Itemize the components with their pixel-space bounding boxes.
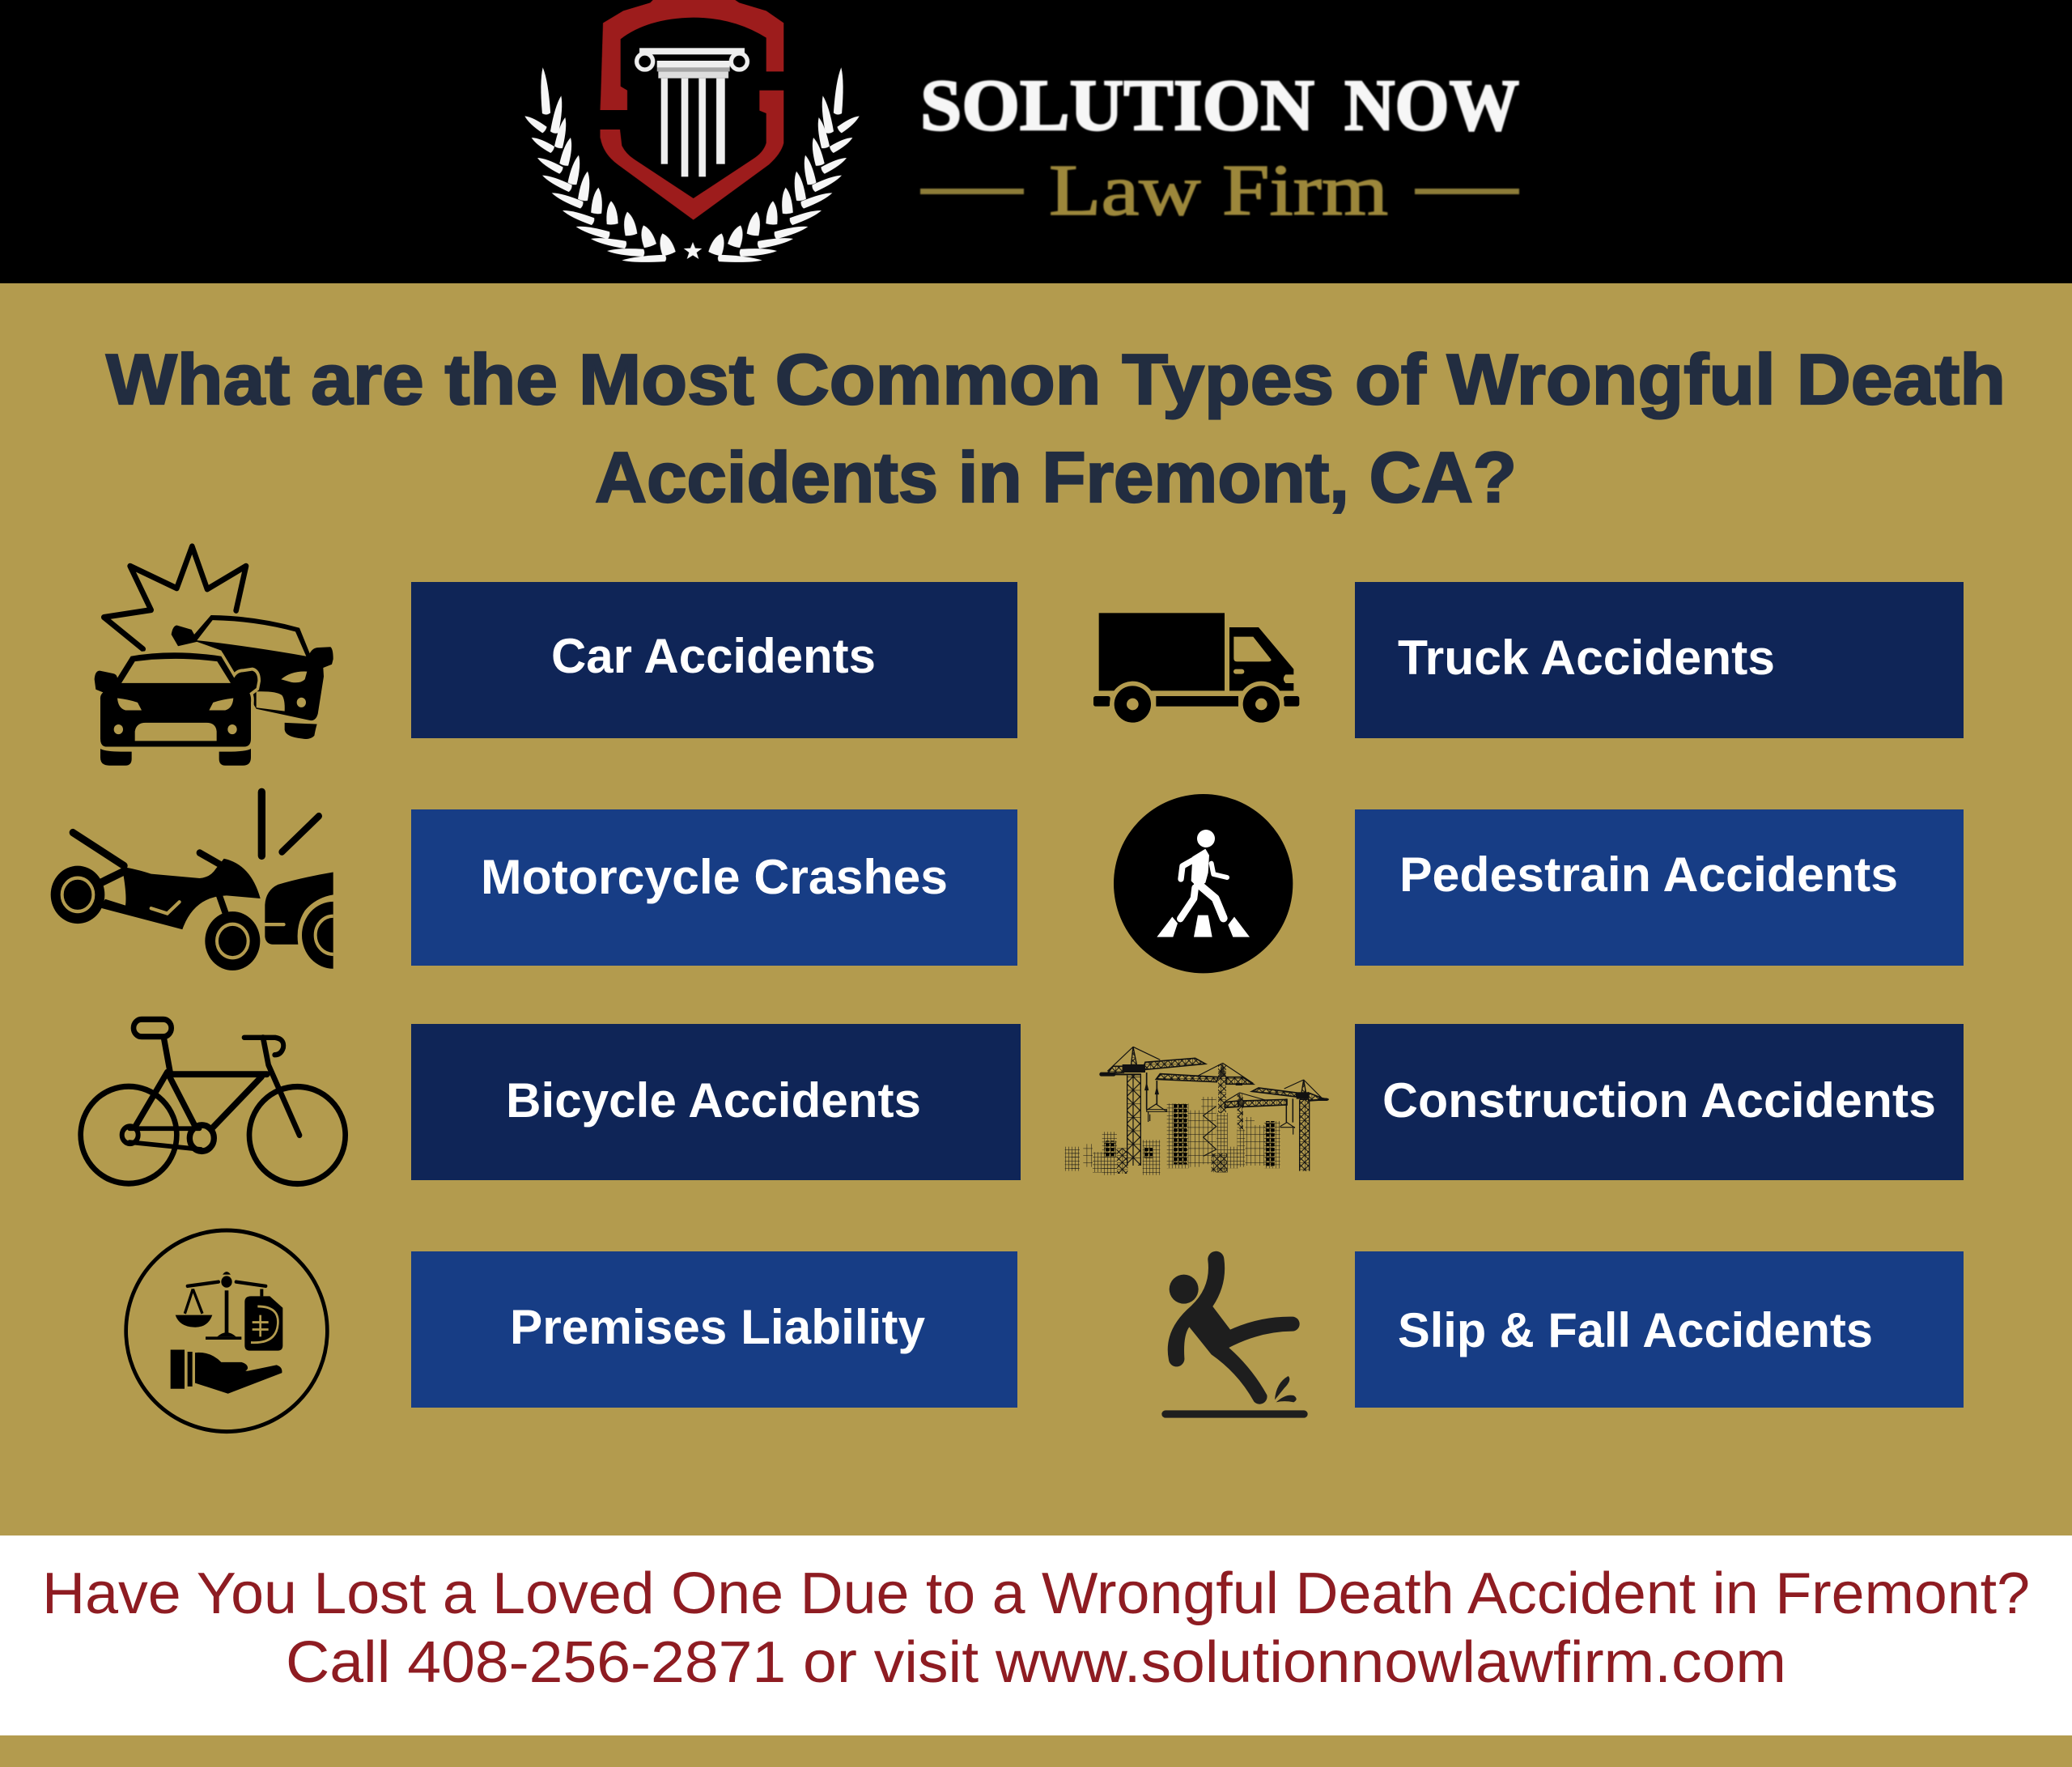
box: car accidents [411,582,1017,738]
box: slip and fall accidents [1355,1251,1964,1408]
box: construction accidents [1355,1024,1964,1180]
gold panel [0,283,2072,1536]
box: bicycle accidents [411,1024,1021,1180]
header band [0,0,2072,283]
box: slip and fall accidents: Slip & Fall Accidents [1398,1303,1873,1357]
box: pedestrain accidents [1355,809,1964,966]
icon: car crash [95,546,333,766]
box: truck accidents: Truck Accidents [1398,631,1775,685]
box: premises liability [411,1251,1017,1408]
laurel left [523,67,676,264]
box: pedestrain accidents: Pedestrain Accidents [1399,847,1898,902]
icon: motorcycle crash [51,792,364,971]
icon: truck [1093,613,1299,727]
title: What are the Most Common Types of Wrongful Death [106,339,2006,419]
star [684,242,702,259]
logo name: NOW [1344,66,1519,146]
icon: bicycle [81,1019,346,1183]
box: motorcycle crashes: Motorcycle Crashes [481,850,948,904]
box: motorcycle crashes [411,809,1017,966]
title: Accidents in Fremont, CA? [595,437,1517,517]
call to action line 2: Call 408-256-2871 or visit www.solutionnowlawfirm.com [286,1630,1786,1695]
icon: scales and hand [126,1230,327,1432]
box: construction accidents: Construction Accidents [1382,1073,1936,1128]
logo emblem [523,0,861,264]
call to action band [0,1536,2072,1735]
icon: construction cranes [1065,1047,1329,1175]
title [106,339,2006,517]
box: premises liability: Premises Liability [510,1300,926,1354]
logo subtitle [920,151,1519,231]
column [637,48,747,176]
logo name: SOLUTION [920,66,1314,146]
box: bicycle accidents: Bicycle Accidents [506,1073,921,1128]
call to action line 1: Have You Lost a Loved One Due to a Wrongful Death Accident in Fremont? [42,1561,2030,1626]
logo name [920,66,1519,146]
icon: slip and fall [1161,1251,1308,1418]
icon: pedestrian crossing [1114,794,1293,973]
box: truck accidents [1355,582,1964,738]
box: car accidents: Car Accidents [551,629,876,683]
shield [601,0,783,220]
laurel right [708,67,861,264]
logo subtitle: Law Firm [1049,151,1388,231]
